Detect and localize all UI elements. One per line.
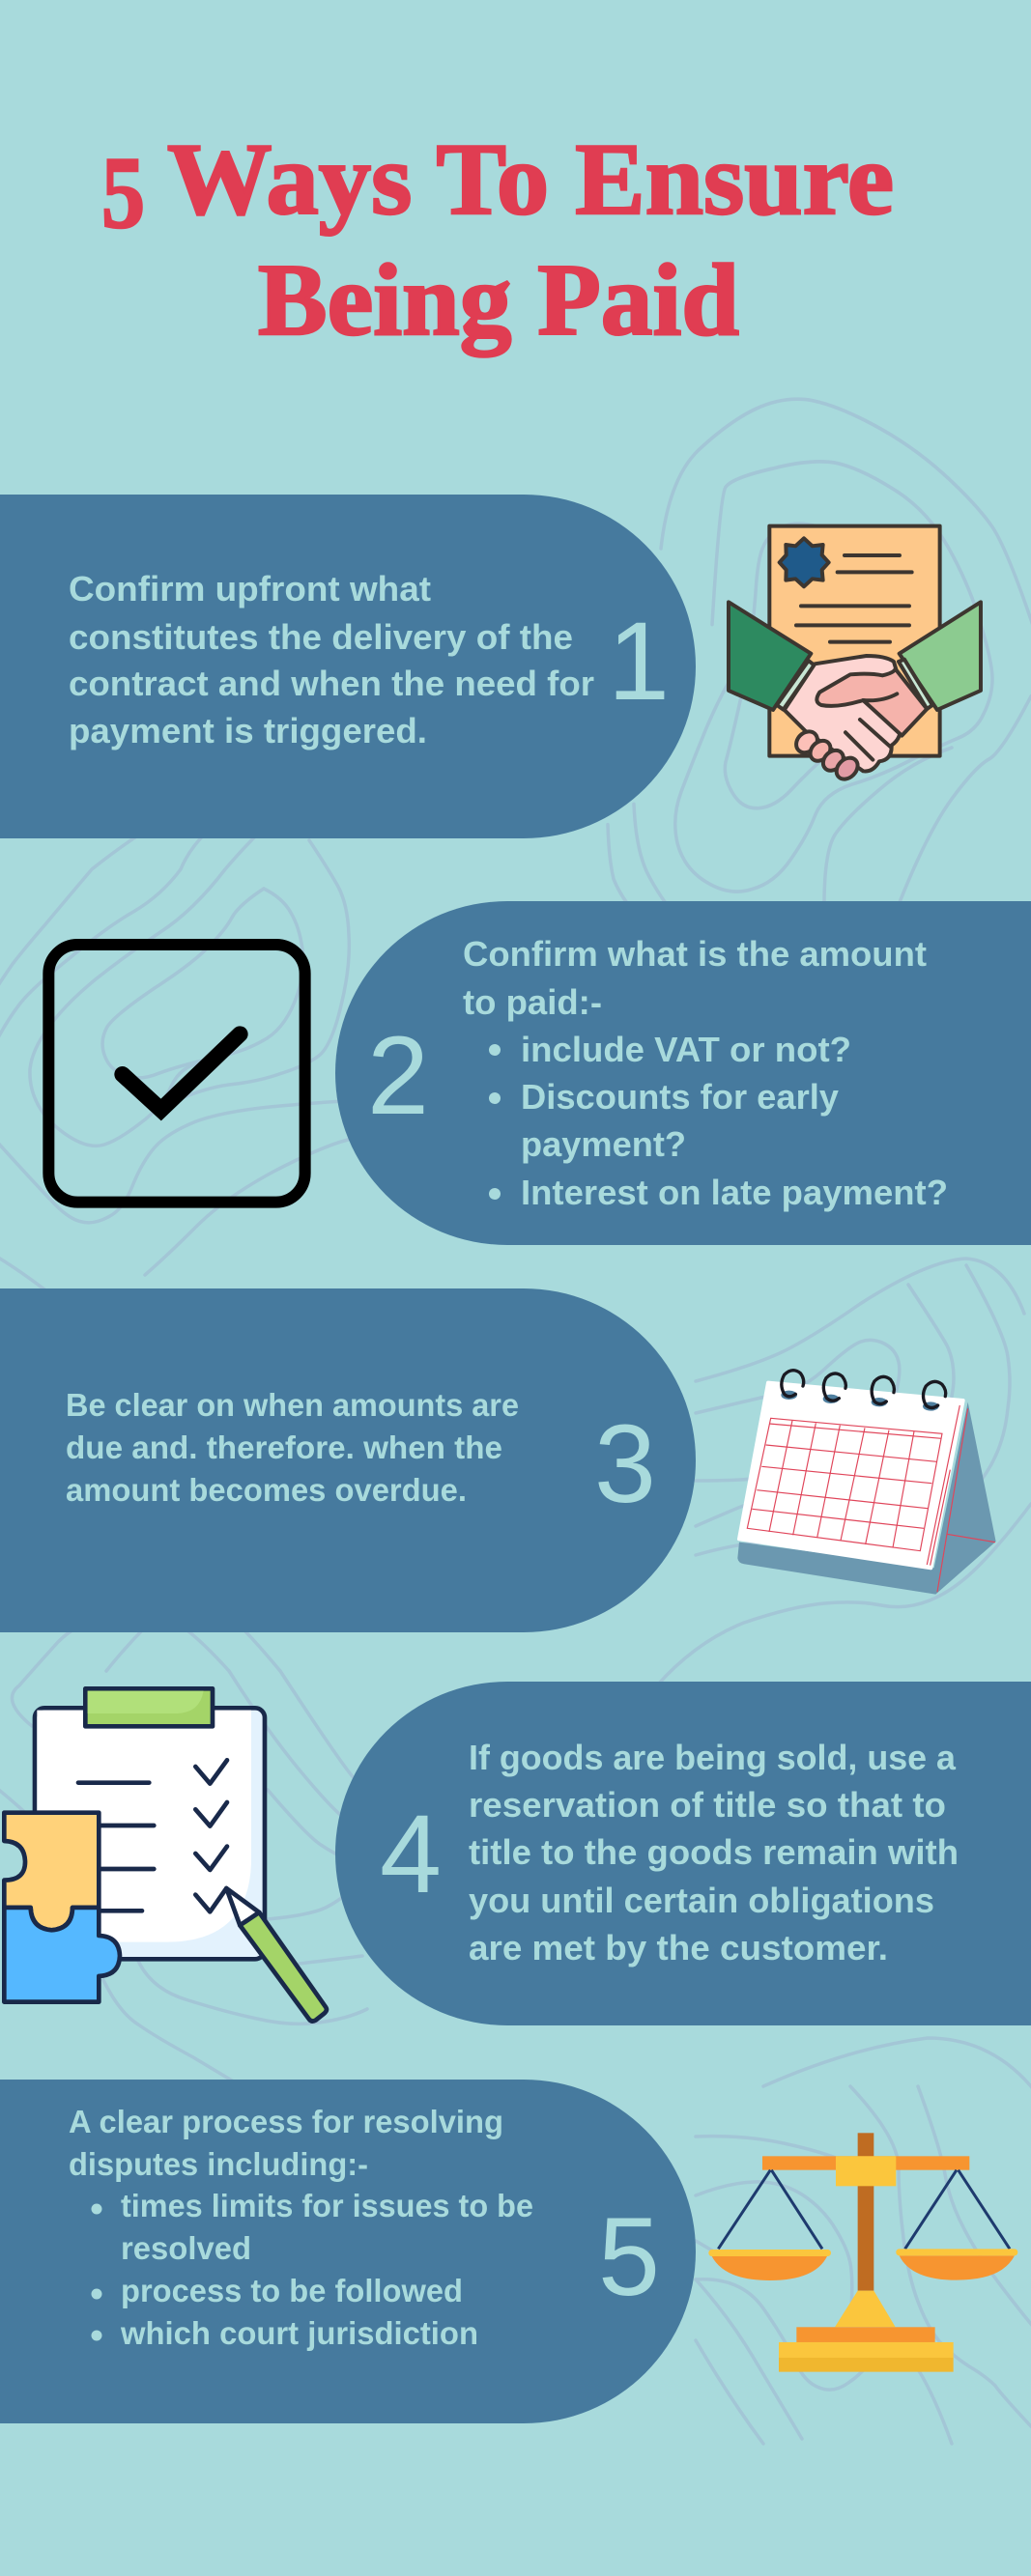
icon: clipboard with puzzle and pencil: [4, 1688, 327, 2022]
step 2 text: Interest on late payment?: [521, 1173, 948, 1212]
step 3 text: amount becomes overdue.: [66, 1472, 467, 1508]
step 2 text: Confirm what is the amount: [463, 934, 927, 974]
step 5 text: [69, 2105, 533, 2352]
panel: step 4: [335, 1682, 1031, 2025]
step 3 text: Be clear on when amounts are: [66, 1387, 519, 1423]
step 5 number: 5: [598, 2195, 660, 2319]
title: [101, 123, 894, 356]
panel: step 3: [0, 1288, 696, 1632]
step 2 text: to paid:-: [463, 982, 602, 1022]
title: Being Paid: [258, 243, 739, 356]
step 2 text: include VAT or not?: [521, 1030, 851, 1069]
step 5 text: disputes including:-: [69, 2147, 368, 2183]
step 4 text: If goods are being sold, use a: [469, 1738, 957, 1777]
icon: desk calendar: [737, 1371, 996, 1595]
step 5 text: A clear process for resolving: [69, 2105, 503, 2140]
step 4 text: [469, 1738, 959, 1967]
step 4 text: you until certain obligations: [469, 1881, 934, 1920]
panel: step 2: [335, 901, 1031, 1245]
step 1 text: payment is triggered.: [69, 711, 427, 750]
step 2 text: payment?: [521, 1124, 686, 1164]
step 5 text: which court jurisdiction: [120, 2316, 478, 2352]
icon: balance scales: [708, 2133, 1017, 2372]
step 2 text: Discounts for early: [521, 1077, 840, 1117]
step 1 text: constitutes the delivery of the: [69, 617, 573, 657]
panel: step 1: [0, 495, 696, 838]
panel: step 5: [0, 2080, 696, 2423]
step 4 text: are met by the customer.: [469, 1928, 888, 1967]
step 1 text: contract and when the need for: [69, 664, 594, 703]
step 3 number: 3: [594, 1402, 656, 1526]
title: Ways To Ensure: [167, 123, 894, 236]
step 2 text: [463, 934, 948, 1212]
step 4 number: 4: [380, 1793, 442, 1916]
step 5 text: process to be followed: [121, 2274, 463, 2309]
step 3 text: due and. therefore. when the: [66, 1430, 502, 1465]
icon: checkbox: [48, 945, 305, 1203]
icon: contract handshake: [729, 526, 981, 783]
step 4 text: title to the goods remain with: [469, 1832, 959, 1872]
step 4 text: reservation of title so that to: [469, 1785, 946, 1825]
title: 5: [101, 136, 145, 249]
step 1 number: 1: [608, 600, 670, 723]
step 2 number: 2: [367, 1014, 429, 1138]
step 1 text: [69, 569, 594, 750]
step 5 text: times limits for issues to be: [121, 2189, 533, 2224]
step 1 text: Confirm upfront what: [69, 569, 431, 609]
step 3 text: [66, 1387, 519, 1508]
step 5 text: resolved: [121, 2231, 251, 2267]
